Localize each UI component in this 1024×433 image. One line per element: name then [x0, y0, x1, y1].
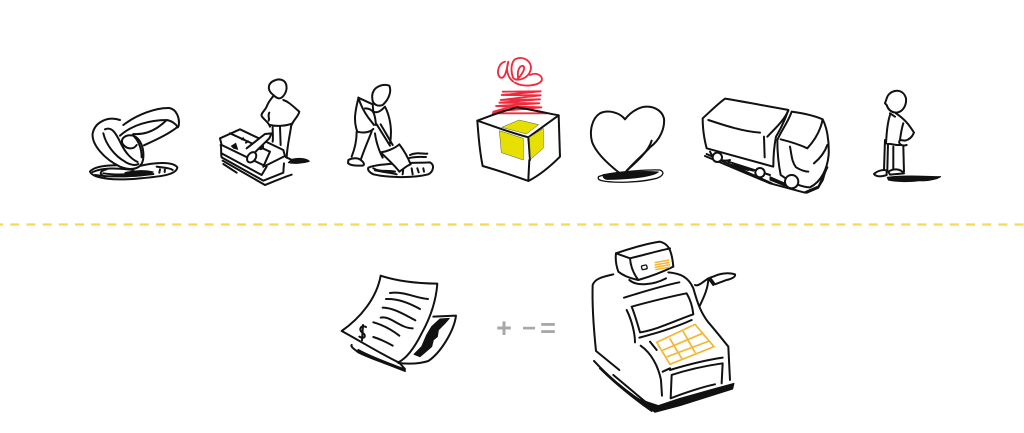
icon: heart with shadow: [591, 107, 664, 182]
register base shadow: [594, 361, 734, 412]
plus, minus, equals signs: =: [540, 313, 556, 343]
red scribble: [493, 58, 547, 113]
icon: cash register: [593, 242, 735, 412]
icon: person digging with shovel: [348, 85, 433, 177]
icon: invoice papers with dollar sign: [342, 276, 456, 371]
icon: standing person: [874, 91, 941, 182]
divider: dashed yellow line: [0, 223, 1024, 226]
icon: person standing behind book stack: [220, 79, 309, 185]
icon: interlocked rings: [90, 108, 179, 179]
plus, minus, equals signs: [496, 313, 556, 343]
plus, minus, equals signs: +: [496, 313, 512, 343]
icon: truck: [703, 99, 829, 193]
plus, minus, equals signs: −: [522, 315, 536, 342]
icon: box with yellow glow and red scribble: [477, 58, 560, 181]
